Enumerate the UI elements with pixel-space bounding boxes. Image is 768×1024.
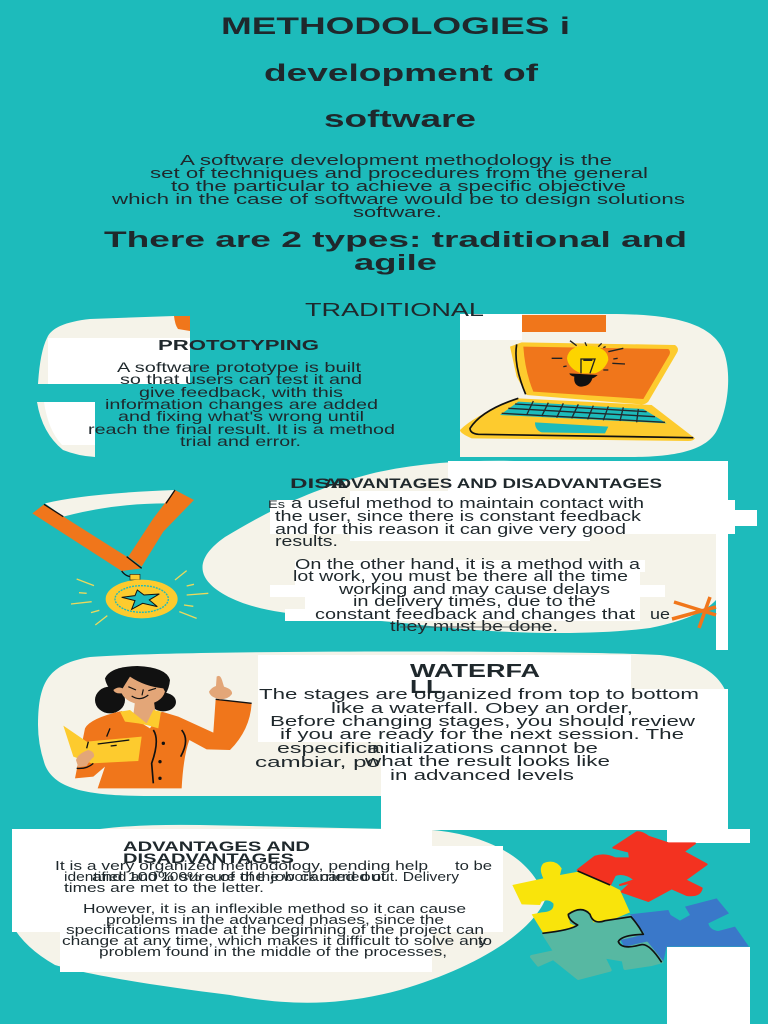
text block: prototyping advantages [268, 476, 670, 635]
text block: prototyping: reach the final result. It is a method [88, 421, 395, 437]
panel: laptop background [460, 314, 728, 457]
text block: waterfall advantages: to [478, 934, 492, 948]
text block: waterfall advantages: identified and 100% sure of the work carried out. Delivery [64, 870, 460, 884]
text block: waterfall: initializations cannot be [367, 740, 598, 757]
text block: waterfall: The stages are organized from top to bottom [259, 686, 699, 703]
text block: waterfall advantages: specifications made at the beginning of the project can [66, 923, 484, 937]
panel: waterfall advantages background [12, 825, 750, 1024]
intro text: A software development methodology is the [180, 153, 612, 169]
title [221, 13, 570, 133]
intro text: set of techniques and procedures from the general [150, 166, 648, 182]
intro text: which in the case of software would be to design solutions [110, 192, 685, 208]
text block: prototyping advantages: lot work, you must be there all the time [293, 569, 628, 585]
text block: waterfall advantages: problems in the advanced phases, since the [106, 913, 444, 927]
title: METHODOLOGIES i [221, 13, 570, 40]
text block: waterfall advantages: It is a very organized methodology, pending help [55, 859, 428, 873]
icon: laptop with light bulb [460, 341, 695, 441]
text block: waterfall advantages: change at any time, which makes it difficult to solve any [62, 934, 488, 948]
text block: prototyping advantages: results. [275, 534, 338, 550]
text block: waterfall: LL [410, 676, 442, 697]
text block: waterfall advantages [55, 838, 492, 959]
text block: waterfall advantages: times are met to the letter. [64, 881, 264, 895]
text block: prototyping advantages: On the other hand, it is a method with a [295, 557, 641, 573]
title: development of [264, 60, 540, 87]
text block: prototyping advantages: Es [268, 499, 286, 511]
text block: prototyping [88, 337, 395, 449]
text block: waterfall: especifica [277, 740, 381, 757]
text block: prototyping advantages: a useful method to maintain contact with [291, 496, 644, 512]
intro text: to the particular to achieve a specific objective [171, 179, 626, 195]
text block: waterfall: WATERFA [410, 660, 540, 681]
text block: prototyping: information changes are added [105, 396, 378, 412]
text block: prototyping advantages: and for this reason it can give very good [275, 522, 626, 538]
text block: prototyping advantages: the user, since there is constant feedback [275, 509, 642, 525]
text block: prototyping: so that users can test it and [120, 371, 362, 387]
subheading: types [104, 227, 687, 275]
text block: waterfall advantages: and 100% sure of the job carried out [92, 870, 387, 884]
text block: prototyping: give feedback, with this [139, 384, 343, 400]
text block: prototyping advantages: ADVANTAGES AND DISADVANTAGES [324, 476, 662, 491]
text block: prototyping advantages: working and may cause delays [338, 582, 610, 598]
panel: prototyping background [37, 316, 190, 457]
text block: prototyping: trial and error. [180, 433, 301, 449]
text block: waterfall: what the result looks like [364, 753, 610, 770]
text block: prototyping: and fixing what's wrong until [118, 408, 364, 424]
panel: waterfall background [38, 651, 750, 843]
text block: waterfall advantages: However, it is an inflexible method so it can cause [83, 902, 466, 916]
text block: waterfall: if you are ready for the next session. The [280, 726, 684, 743]
text block: waterfall advantages: DISADVANTAGES [123, 850, 294, 866]
icon: woman holding a notebook [63, 666, 252, 788]
subheading: types: agile [354, 250, 437, 275]
text block: waterfall: like a waterfall. Obey an order, [331, 700, 633, 717]
text block: waterfall advantages: to be [455, 859, 492, 873]
text block: prototyping: A software prototype is built [117, 359, 361, 375]
text block: prototyping advantages: they must be done. [390, 619, 558, 635]
traditional heading: TRADITIONAL [305, 299, 484, 320]
intro text [110, 153, 685, 221]
text block: prototyping advantages: ue [650, 607, 670, 623]
text block: waterfall [255, 660, 699, 784]
icon: puzzle pieces [512, 832, 749, 978]
text block: prototyping advantages: DISA [290, 476, 348, 491]
subheading: types: There are 2 types: traditional and [104, 227, 687, 252]
intro text: software. [353, 205, 442, 221]
text block: waterfall: cambiar, po [255, 754, 380, 771]
text block: prototyping advantages: constant feedback and changes that [315, 607, 635, 623]
panel: prototyping advantages background [202, 461, 757, 650]
icon: medal [32, 490, 208, 625]
title: software [324, 106, 476, 133]
text block: prototyping: PROTOTYPING [158, 337, 319, 354]
text block: waterfall advantages: ADVANTAGES AND [123, 838, 310, 854]
text block: waterfall advantages: problem found in the middle of the processes, [99, 945, 447, 959]
text block: waterfall: Before changing stages, you should review [270, 713, 695, 730]
icon: orange asterisk [672, 597, 716, 628]
text block: waterfall: in advanced levels [390, 767, 574, 784]
text block: prototyping advantages: in delivery times, due to the [353, 594, 596, 610]
